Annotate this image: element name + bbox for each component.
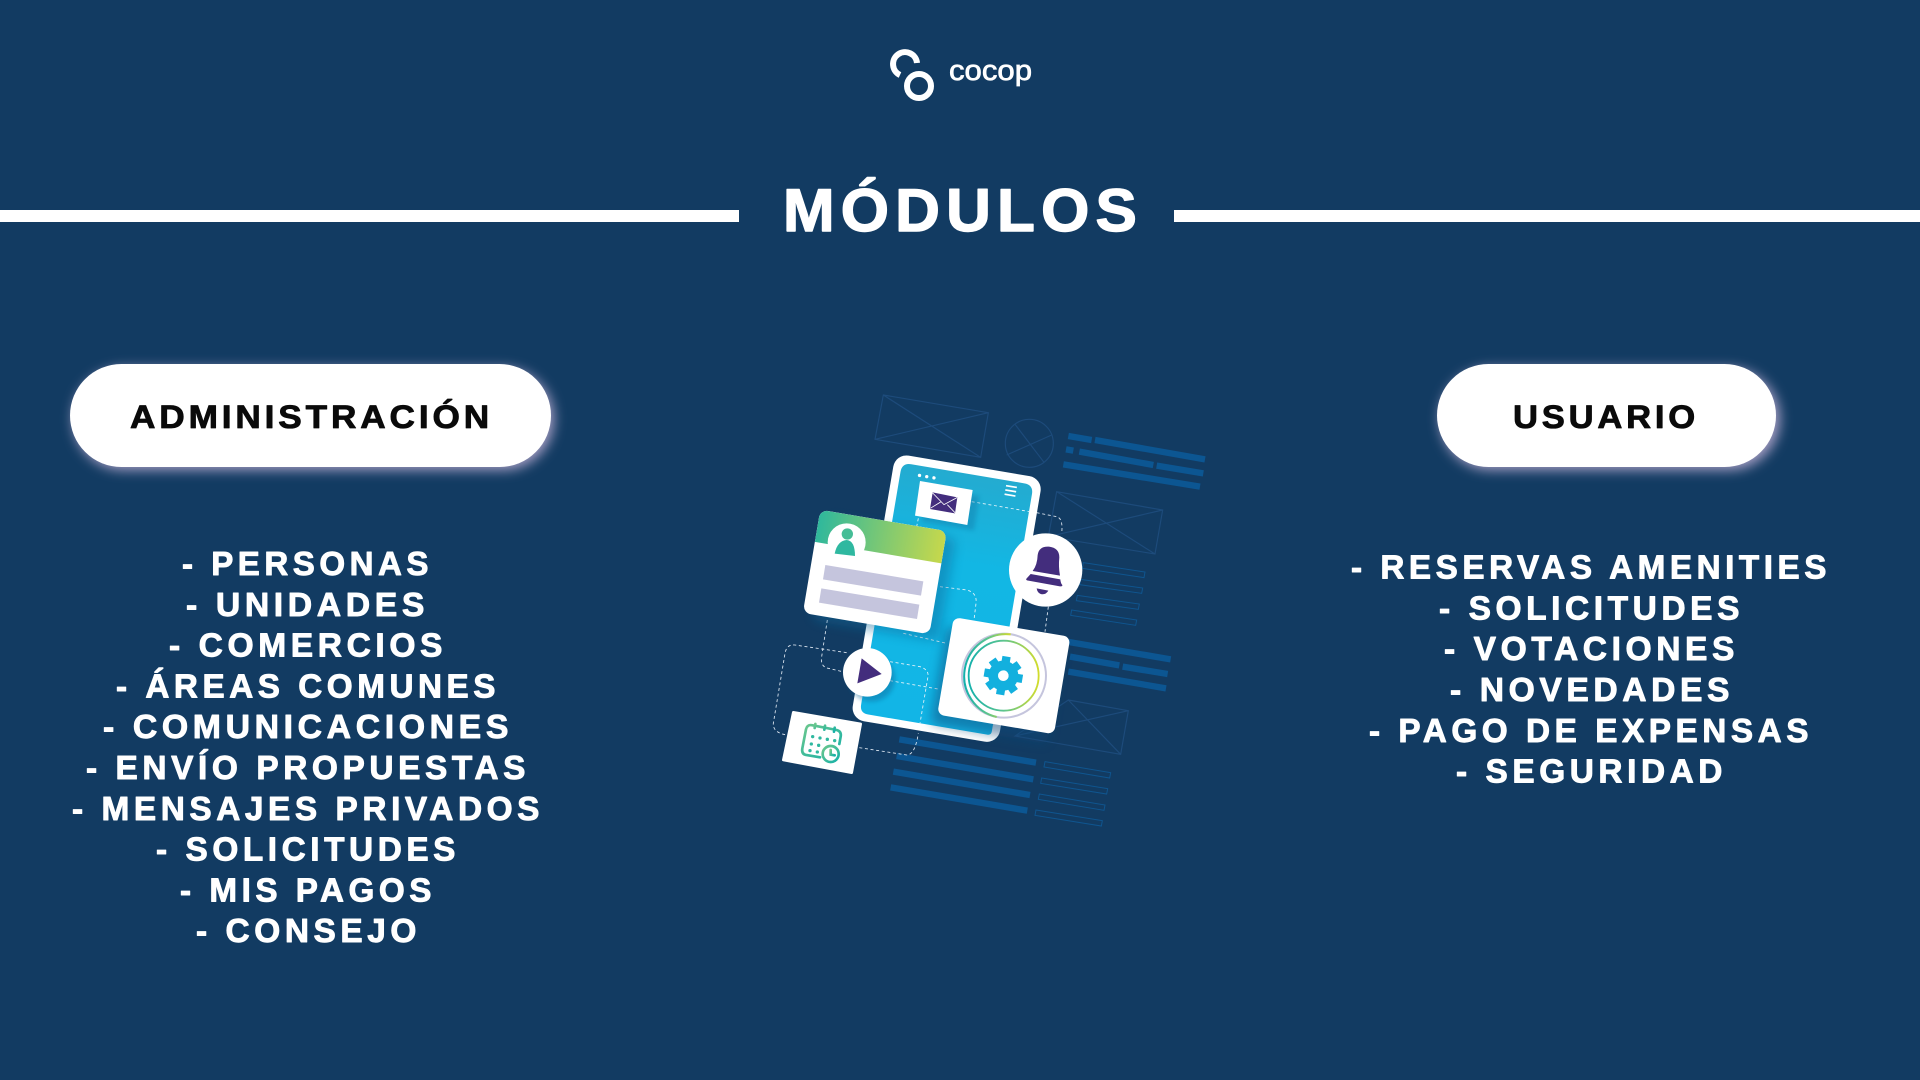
icon: gear	[981, 653, 1026, 698]
list: administración modules	[72, 545, 544, 949]
icon: bell	[1009, 533, 1082, 607]
icon: avatar	[828, 523, 866, 561]
phone	[851, 453, 1043, 744]
gear rings	[962, 634, 1046, 718]
list: usuario modules: - SEGURIDAD	[1456, 753, 1727, 790]
list: administración modules: - MIS PAGOS	[180, 871, 436, 908]
list: usuario modules: - NOVEDADES	[1450, 671, 1734, 708]
profile lines	[819, 565, 923, 619]
panel: administración	[70, 364, 554, 949]
card: settings gear	[930, 617, 1070, 744]
pill heading: usuario	[1437, 364, 1780, 470]
list: administración modules: - MENSAJES PRIVADOS	[72, 790, 544, 827]
list: administración modules: - COMUNICACIONES	[103, 708, 513, 745]
list: administración modules: - ÁREAS COMUNES	[116, 667, 500, 704]
logo wordmark: cocop	[949, 55, 1032, 87]
icon: play button	[843, 648, 895, 702]
list: administración modules: - PERSONAS	[182, 545, 433, 582]
list: usuario modules: - SOLICITUDES	[1439, 590, 1744, 627]
pill heading: usuario: USUARIO	[1513, 399, 1699, 435]
icon: envelope	[930, 492, 957, 513]
phone menu icon	[1005, 486, 1017, 496]
pill heading: administración	[70, 364, 554, 470]
dashed connectors on phone	[890, 502, 1030, 723]
title with rules	[0, 177, 1920, 244]
illustration: phone app	[773, 395, 1205, 826]
title: MÓDULOS	[783, 177, 1143, 244]
panel: usuario	[1351, 364, 1831, 790]
list: usuario modules	[1351, 549, 1831, 790]
dashed connectors behind phone	[773, 513, 1062, 755]
list: usuario modules: - VOTACIONES	[1444, 630, 1739, 667]
icon: calendar	[802, 724, 841, 762]
icon: logo rings	[893, 52, 931, 98]
card: email	[915, 481, 979, 531]
logo: cocop	[893, 52, 1032, 98]
card: profile	[803, 510, 956, 642]
list: administración modules: - UNIDADES	[186, 586, 429, 623]
card: calendar	[783, 712, 861, 773]
list: administración modules: - CONSEJO	[196, 912, 421, 949]
list: administración modules: - ENVÍO PROPUESTAS	[86, 749, 530, 786]
list: administración modules: - COMERCIOS	[169, 627, 447, 664]
list: usuario modules: - RESERVAS AMENITIES	[1351, 549, 1831, 586]
phone status dots	[918, 473, 936, 480]
list: usuario modules: - PAGO DE EXPENSAS	[1369, 712, 1813, 749]
list: administración modules: - SOLICITUDES	[156, 831, 460, 868]
pill heading: administración: ADMINISTRACIÓN	[130, 399, 493, 435]
wireframe background	[875, 395, 1205, 826]
